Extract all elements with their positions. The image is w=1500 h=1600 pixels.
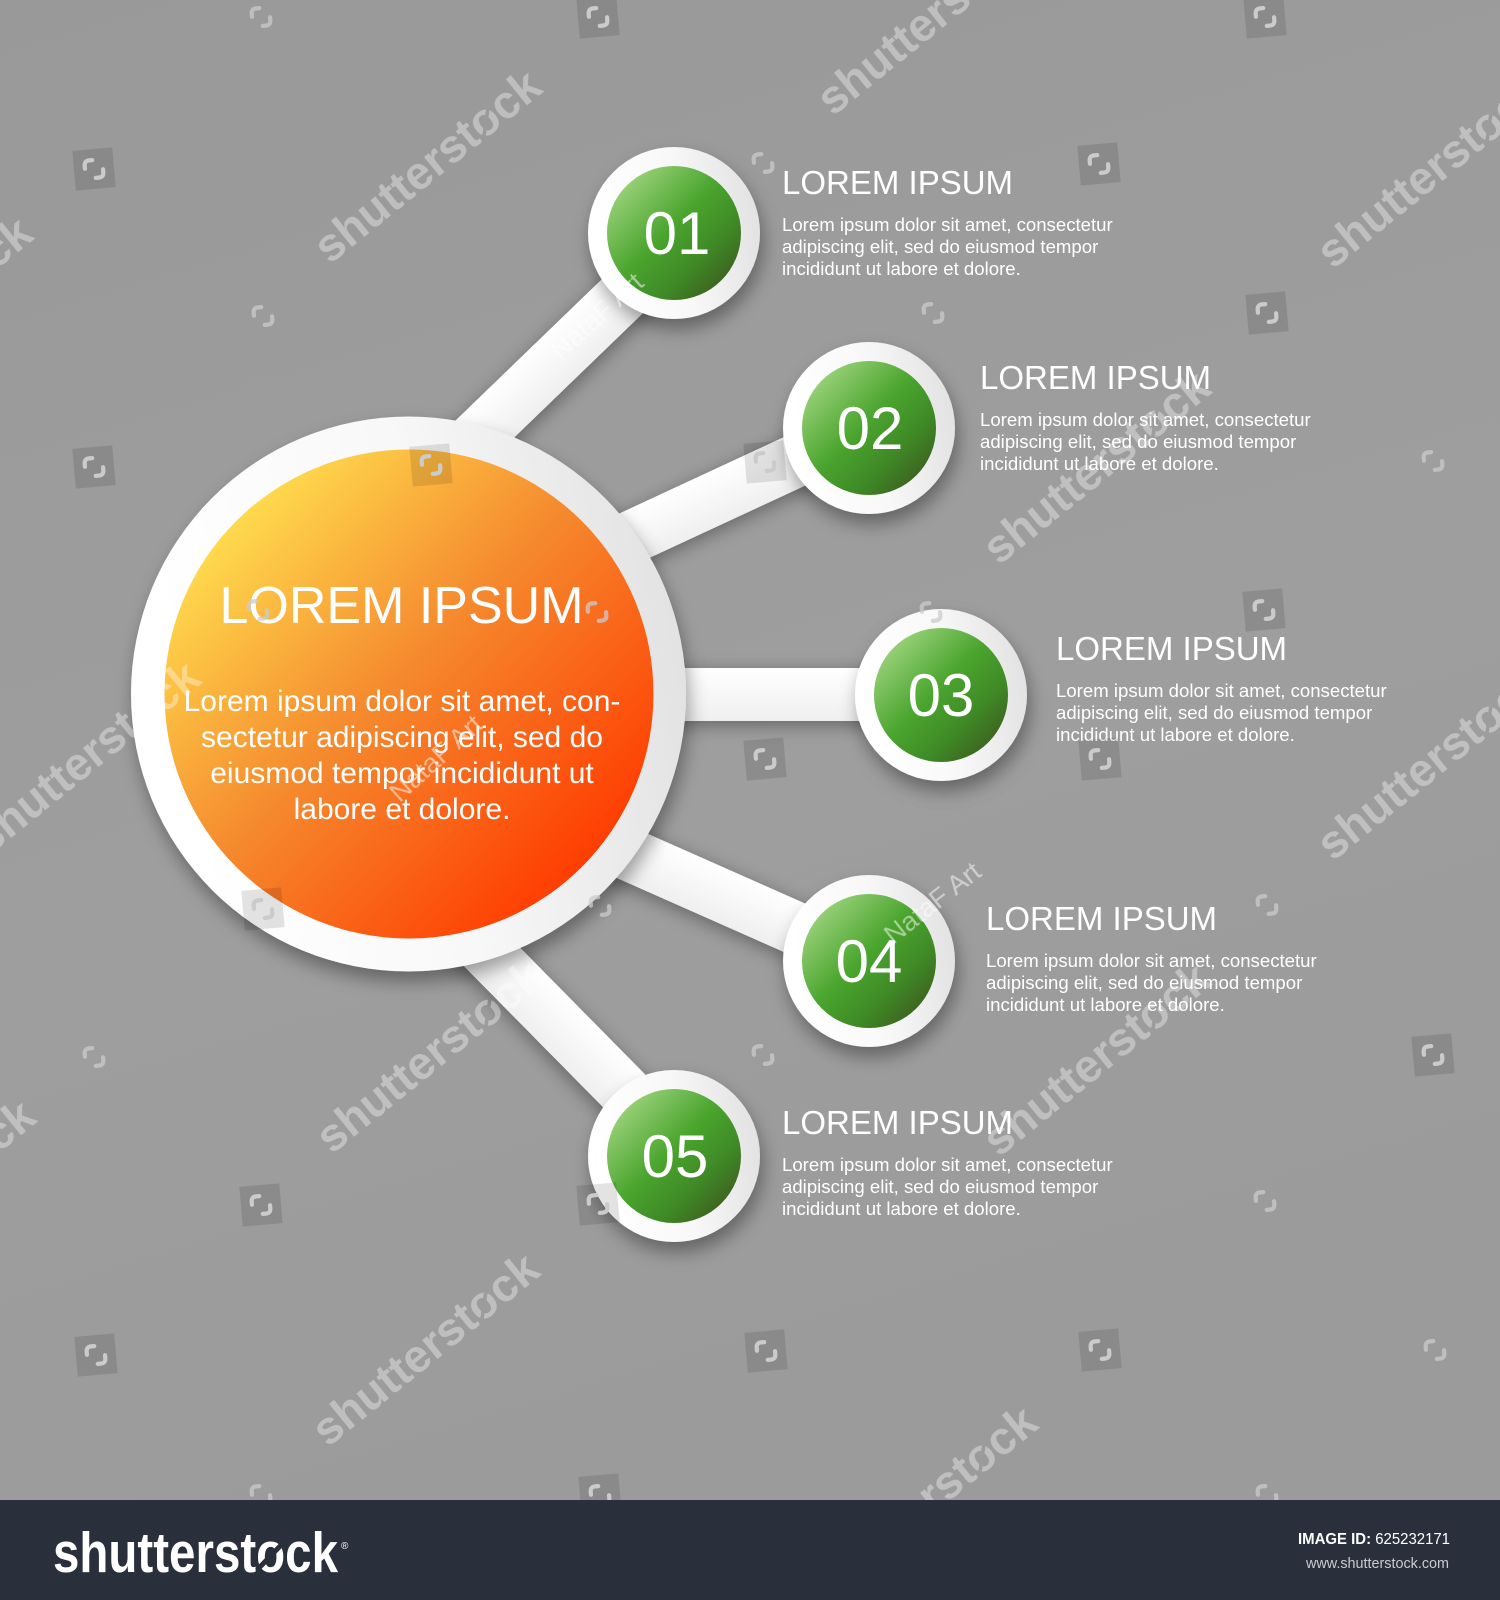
item 04: incididunt ut labore et dolore. <box>986 994 1225 1015</box>
item 02: adipiscing elit, sed do eiusmod tempor <box>980 431 1296 452</box>
item 05: 05 <box>642 1123 708 1190</box>
footer logo: shutterstock <box>53 1521 338 1585</box>
watermark overlay: NataF Art <box>878 856 987 950</box>
arm to item 02 <box>529 403 880 604</box>
item 04: 04 <box>836 928 902 995</box>
footer url: www.shutterstock.com <box>1305 1555 1449 1572</box>
item 01: incididunt ut labore et dolore. <box>782 258 1021 279</box>
central body text: eiusmod tempor incididunt ut <box>210 757 594 790</box>
footer image id: IMAGE ID: 625232171 <box>1298 1531 1450 1548</box>
item 03: adipiscing elit, sed do eiusmod tempor <box>1056 702 1372 723</box>
item 04: adipiscing elit, sed do eiusmod tempor <box>986 972 1302 993</box>
item 04: LOREM IPSUM <box>986 900 1217 937</box>
item 02: 02 <box>837 395 903 462</box>
item 01: adipiscing elit, sed do eiusmod tempor <box>782 236 1098 257</box>
item 02: LOREM IPSUM <box>980 359 1211 396</box>
item 02 <box>783 342 1311 514</box>
arm to item 01 <box>412 218 702 501</box>
item 01 <box>588 147 1113 319</box>
item 05: adipiscing elit, sed do eiusmod tempor <box>782 1176 1098 1197</box>
item 03 <box>855 609 1387 781</box>
item 05 <box>588 1070 1113 1242</box>
item 03: 03 <box>908 662 974 729</box>
arm to item 03 <box>660 668 941 721</box>
item 05: Lorem ipsum dolor sit amet, consectetur <box>782 1154 1113 1175</box>
footer logo: ® <box>341 1541 349 1552</box>
central heading: LOREM IPSUM <box>219 577 584 635</box>
central body text <box>184 685 620 826</box>
watermark overlay: shutterstock <box>305 948 553 1163</box>
watermark overlay: shutterstock <box>303 58 551 273</box>
arm to item 05 <box>411 875 703 1170</box>
item 04: Lorem ipsum dolor sit amet, consectetur <box>986 950 1317 971</box>
item 01: LOREM IPSUM <box>782 164 1013 201</box>
watermark overlay: shutterstock <box>301 1241 549 1456</box>
central body text: sectetur adipiscing elit, sed do <box>201 721 603 754</box>
item 03: Lorem ipsum dolor sit amet, consectetur <box>1056 680 1387 701</box>
footer bar <box>0 1500 1500 1600</box>
central body text: Lorem ipsum dolor sit amet, con- <box>184 685 620 718</box>
item 01: Lorem ipsum dolor sit amet, consectetur <box>782 214 1113 235</box>
item 02: Lorem ipsum dolor sit amet, consectetur <box>980 409 1311 430</box>
watermark overlay: NataF Art <box>384 709 489 808</box>
arm to item 04 <box>529 791 880 985</box>
central body text: labore et dolore. <box>294 793 510 826</box>
watermark overlay: shutterstock <box>972 359 1220 574</box>
item 05: incididunt ut labore et dolore. <box>782 1198 1021 1219</box>
central circle <box>131 416 686 972</box>
item 05: LOREM IPSUM <box>782 1104 1013 1141</box>
item 02: incididunt ut labore et dolore. <box>980 453 1219 474</box>
watermark overlay: shutterstock <box>972 951 1220 1166</box>
connector arms <box>411 218 941 1170</box>
item 01: 01 <box>644 200 710 267</box>
item 04 <box>783 875 1317 1047</box>
watermark overlay: NataF Art <box>545 267 650 366</box>
item 03: LOREM IPSUM <box>1056 630 1287 667</box>
item 03: incididunt ut labore et dolore. <box>1056 724 1295 745</box>
